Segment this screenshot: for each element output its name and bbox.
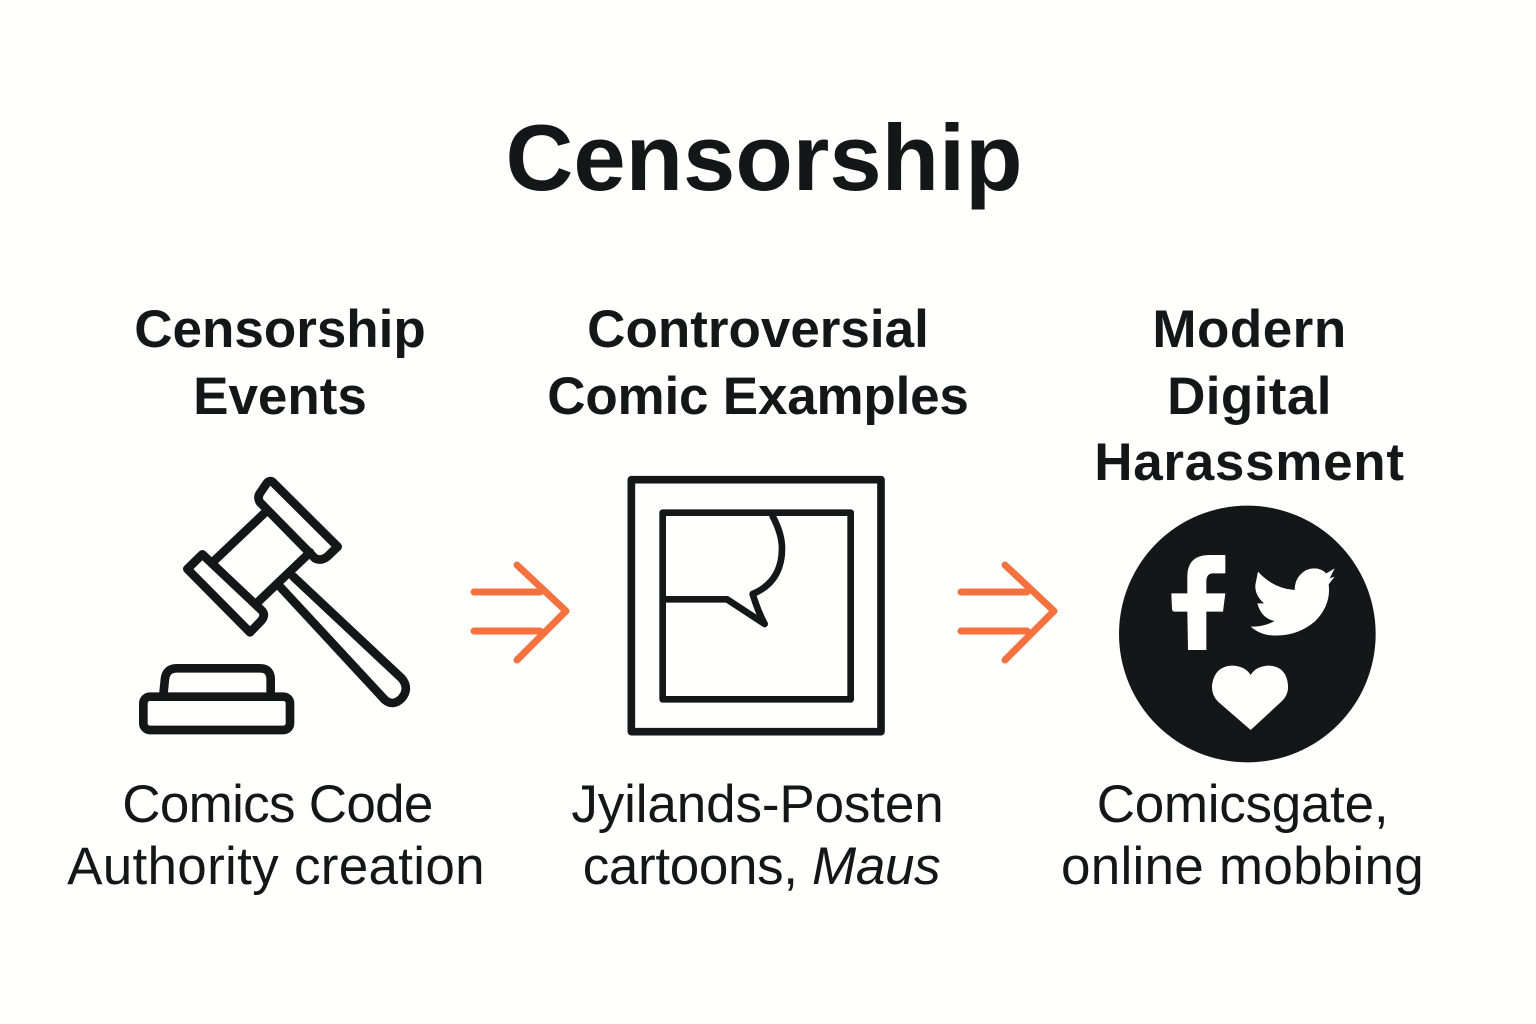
text: jyllands-posten cartoons, maus <box>571 775 944 896</box>
text: comicsgate, online mobbing: online mobbing <box>1061 837 1424 896</box>
text: comics code authority creation: Comics Code <box>122 775 433 834</box>
text: comicsgate, online mobbing: Comicsgate, <box>1097 775 1388 834</box>
text: jyllands-posten cartoons, maus: cartoons, Maus <box>583 837 940 896</box>
heading: controversial comic examples <box>547 300 969 426</box>
text: comics code authority creation: Authority creation <box>67 837 485 896</box>
heading: controversial comic examples: Comic Examples <box>547 366 969 426</box>
text: comicsgate, online mobbing <box>1061 775 1424 896</box>
icon: twitter bird <box>1251 568 1335 636</box>
heading: modern digital harassment: Digital <box>1167 366 1332 426</box>
icon: social media circle <box>1119 506 1376 762</box>
text: comics code authority creation <box>67 775 485 896</box>
icon: comic panel with speech bubble <box>628 476 885 736</box>
heading: censorship events <box>134 300 426 426</box>
arrow: second to third column <box>958 562 1058 664</box>
heading: modern digital harassment <box>1094 300 1405 492</box>
heading: censorship events: Censorship <box>134 300 426 359</box>
heading: modern digital harassment: Modern <box>1152 300 1347 359</box>
heading: censorship events: Events <box>193 366 367 426</box>
heading: controversial comic examples: Controversial <box>587 300 929 359</box>
icon: heart <box>1212 666 1288 730</box>
icon: facebook <box>1171 555 1225 650</box>
arrow: first to second column <box>470 562 570 664</box>
text: jyllands-posten cartoons, maus: Jyilands-Posten <box>571 775 944 834</box>
title: Censorship <box>505 105 1023 210</box>
icon: gavel <box>139 476 410 734</box>
heading: modern digital harassment: Harassment <box>1094 433 1405 492</box>
